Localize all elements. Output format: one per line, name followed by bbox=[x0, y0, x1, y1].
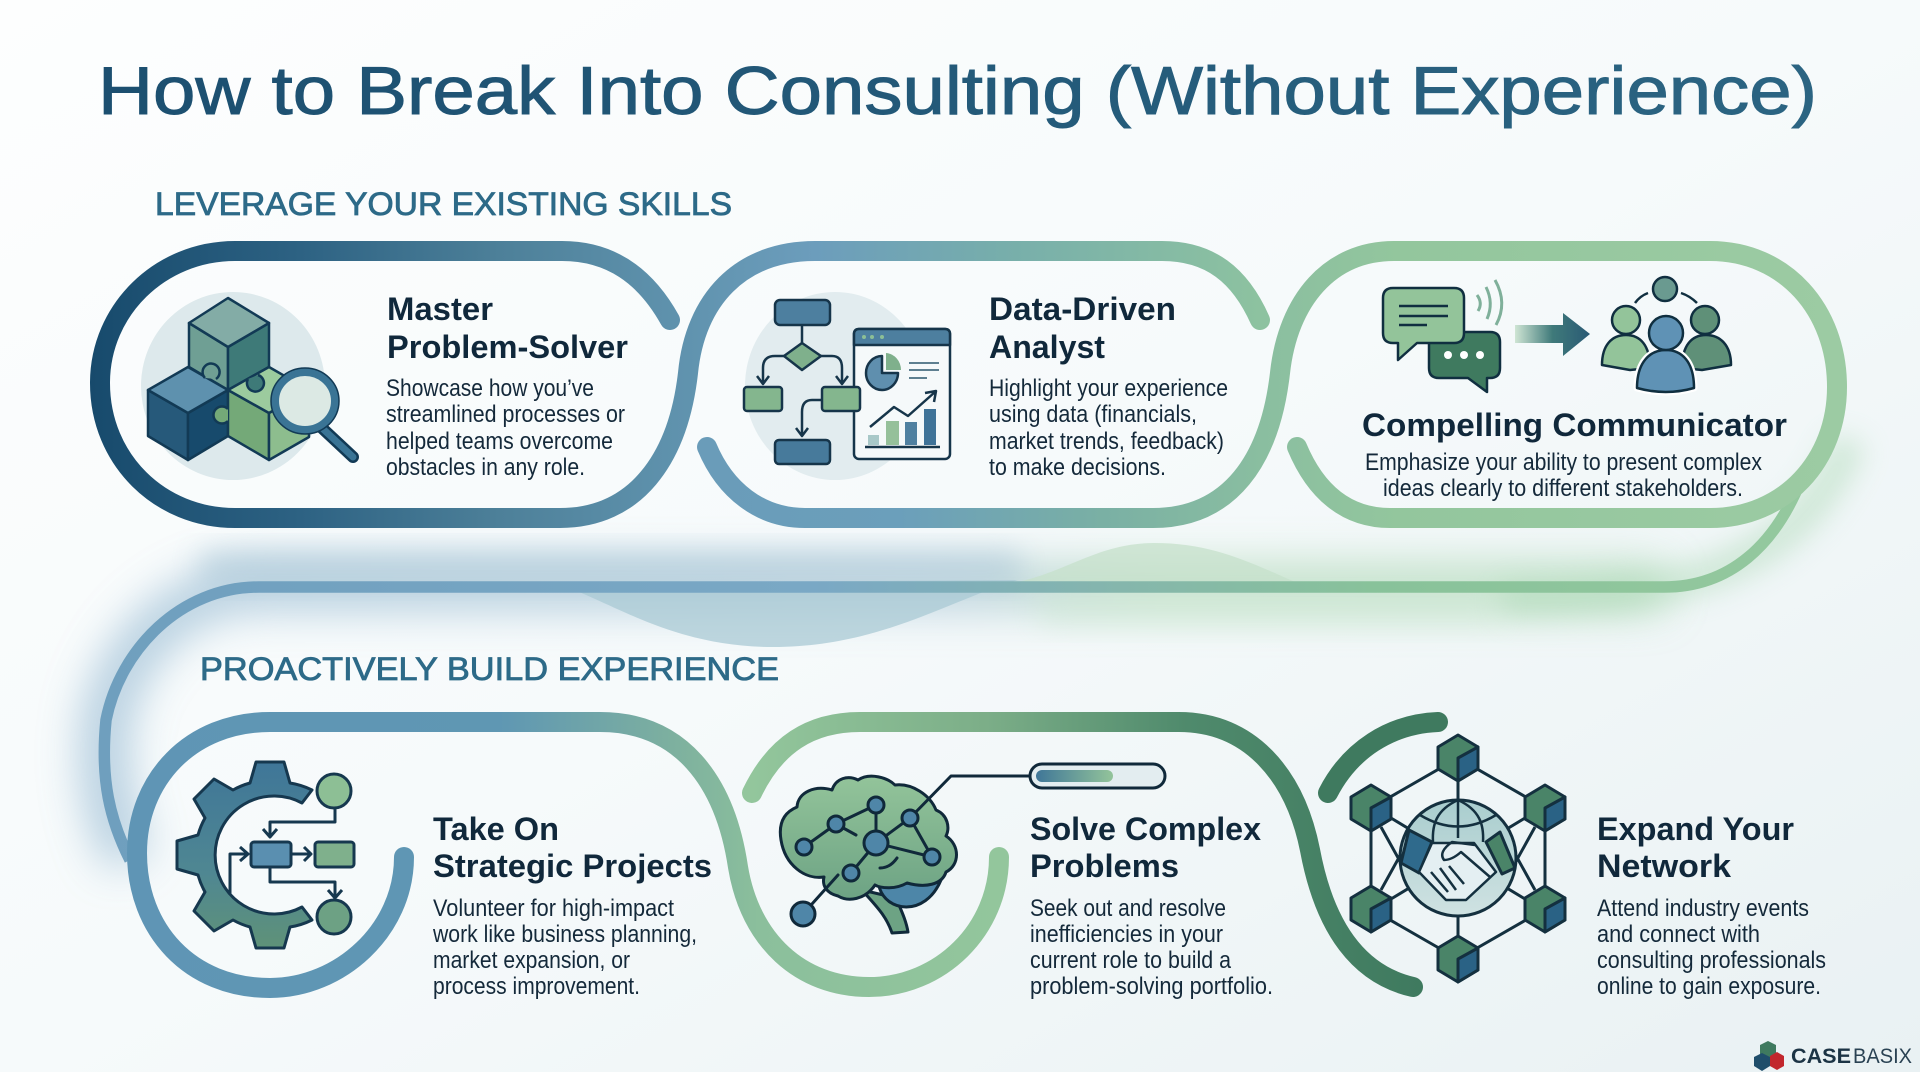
card body bbox=[432, 895, 697, 1000]
card heading bbox=[387, 291, 628, 365]
card body: Seek out and resolve bbox=[1030, 895, 1226, 922]
card heading bbox=[433, 811, 712, 884]
card heading: Expand Your bbox=[1597, 811, 1794, 847]
card heading: Solve Complex bbox=[1030, 811, 1261, 847]
card heading: Take On bbox=[433, 811, 559, 847]
card body bbox=[989, 375, 1228, 481]
card heading: Problem-Solver bbox=[387, 329, 628, 365]
card body bbox=[386, 375, 625, 481]
card heading: Problems bbox=[1030, 848, 1179, 884]
card body: current role to build a bbox=[1030, 947, 1232, 974]
card body: market expansion, or bbox=[433, 947, 630, 974]
ribbon: upper network arc bbox=[1328, 722, 1438, 793]
card body: problem-solving portfolio. bbox=[1030, 973, 1273, 1000]
icon: puzzle cubes with magnifier bbox=[141, 292, 353, 480]
card body: obstacles in any role. bbox=[386, 454, 585, 481]
panel: solve complex problems bbox=[780, 764, 1273, 1000]
card heading bbox=[989, 291, 1176, 365]
card heading bbox=[1030, 811, 1261, 884]
icon: gear with process flow bbox=[177, 762, 354, 948]
panel: expand your network bbox=[1351, 735, 1826, 1000]
card body bbox=[1597, 895, 1826, 1000]
card body: Emphasize your ability to present complex bbox=[1365, 449, 1762, 476]
card body: inefficiencies in your bbox=[1030, 921, 1223, 948]
card heading: Data-Driven bbox=[989, 291, 1176, 327]
icon: speech bubbles, arrow and audience bbox=[1383, 277, 1731, 392]
panel: data-driven analyst bbox=[744, 291, 1228, 481]
card body: process improvement. bbox=[433, 973, 640, 1000]
logo: casebasix: BASIX bbox=[1853, 1045, 1912, 1068]
card heading: Network bbox=[1597, 848, 1731, 884]
card body: consulting professionals bbox=[1597, 947, 1826, 974]
section heading: leverage your existing skills: LEVERAGE YOUR EXISTING SKILLS bbox=[155, 186, 732, 222]
card body: to make decisions. bbox=[989, 454, 1166, 481]
card body bbox=[1365, 449, 1762, 502]
ribbon: strategic projects and lower solve-problems outline bbox=[137, 722, 999, 988]
card body: streamlined processes or bbox=[386, 401, 625, 428]
panel: master problem-solver bbox=[141, 291, 628, 481]
card body: Showcase how you’ve bbox=[386, 375, 594, 402]
card heading: Compelling Communicator bbox=[1362, 407, 1787, 443]
card body: market trends, feedback) bbox=[989, 428, 1224, 455]
icon: globe, handshake and network nodes bbox=[1351, 735, 1565, 982]
card body: helped teams overcome bbox=[386, 428, 613, 455]
card body: using data (financials, bbox=[989, 401, 1197, 428]
logo: casebasix: CASE bbox=[1791, 1045, 1851, 1068]
card body: work like business planning, bbox=[432, 921, 697, 948]
card body bbox=[1030, 895, 1273, 1000]
card body: and connect with bbox=[1597, 921, 1760, 948]
card body: ideas clearly to different stakeholders. bbox=[1383, 475, 1743, 502]
card heading: Analyst bbox=[989, 329, 1105, 365]
section heading: proactively build experience: PROACTIVELY BUILD EXPERIENCE bbox=[200, 651, 779, 687]
panel: take on strategic projects bbox=[177, 762, 712, 1000]
ribbon: upper solve-problems and lower network outline bbox=[752, 722, 1413, 987]
ribbon: data-driven lower edge and communicator pill outline bbox=[707, 251, 1837, 518]
card body: Volunteer for high-impact bbox=[433, 895, 674, 922]
title: How to Break Into Consulting (Without Experience) bbox=[98, 53, 1817, 129]
card body: online to gain exposure. bbox=[1597, 973, 1821, 1000]
card heading bbox=[1597, 811, 1794, 884]
card body: Highlight your experience bbox=[989, 375, 1228, 402]
icon: flowchart and dashboard bbox=[744, 292, 950, 480]
logo: casebasix bbox=[1754, 1041, 1912, 1071]
panel: compelling communicator bbox=[1362, 277, 1787, 502]
ribbon: problem-solver and data-driven pill outline bbox=[100, 251, 1260, 518]
icon: brain network with progress bar bbox=[780, 764, 1165, 933]
card heading: Strategic Projects bbox=[433, 848, 712, 884]
card heading: Master bbox=[387, 291, 493, 327]
card body: Attend industry events bbox=[1597, 895, 1809, 922]
connector line between rows bbox=[104, 480, 1801, 860]
